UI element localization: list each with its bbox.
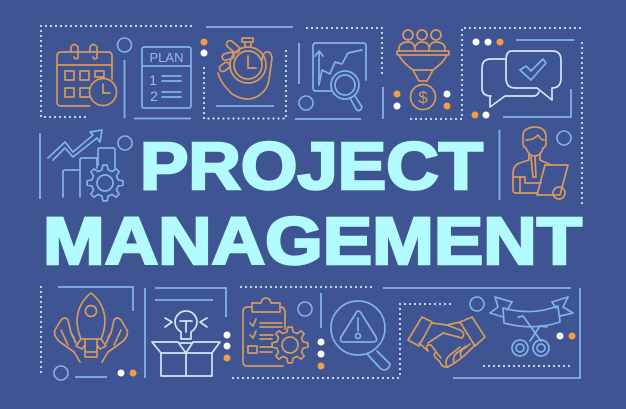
title <box>43 129 582 279</box>
icon: manager with tablet <box>513 127 568 199</box>
decorative colored dots <box>118 38 576 376</box>
icon: chat bubbles <box>482 51 561 107</box>
icon: calendar with clock <box>57 44 116 106</box>
icon: plan sheet: 1 <box>149 72 157 88</box>
title line 1: PROJECT <box>140 129 483 204</box>
icon: plan sheet: PLAN <box>150 50 183 65</box>
icon: plan sheet <box>142 47 191 108</box>
title line 2: MANAGEMENT <box>43 204 582 279</box>
icon: handshake <box>408 317 485 367</box>
icon: sales funnel <box>397 30 449 110</box>
icon: sales funnel: $ <box>418 88 428 107</box>
icon: growth chart with gear <box>48 130 123 201</box>
icon: warning magnifier <box>331 301 390 370</box>
icon: light bulb in box <box>152 311 220 376</box>
icon: plan sheet: 2 <box>150 88 158 104</box>
icon: chart with magnifier <box>313 43 366 111</box>
icon: rocket in hands <box>55 293 127 362</box>
icon: checklist clipboard with gear <box>243 298 308 366</box>
icon: ribbon and scissors <box>490 297 573 356</box>
icon: stopwatch in hand <box>218 38 272 99</box>
circle accents <box>54 38 571 380</box>
